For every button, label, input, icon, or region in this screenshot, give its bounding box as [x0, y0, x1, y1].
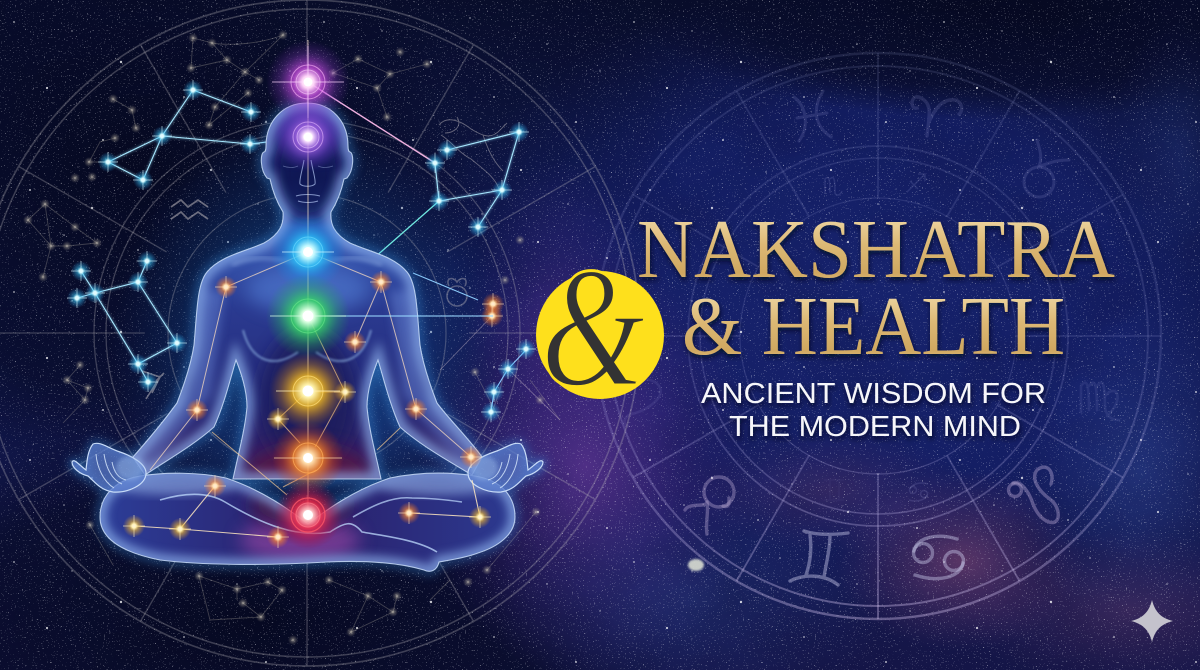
figure outer glow [72, 103, 543, 571]
icon: small cancer glyph [909, 483, 928, 501]
meditating figure [72, 103, 543, 571]
icon: libra glyph left [624, 379, 661, 426]
right zodiac wheel [595, 53, 1161, 619]
icon: crab outline [439, 117, 507, 189]
chakra: solar plexus [270, 353, 346, 429]
icon: sparkle watermark [1131, 600, 1173, 642]
chakra: crown [266, 40, 350, 124]
icon: taurus glyph [1024, 140, 1069, 197]
title [637, 203, 1115, 373]
icon: capricorn-like glyph [142, 371, 164, 399]
chakra: third eye [274, 103, 342, 171]
title line: & HEALTH: & HEALTH [682, 280, 1065, 373]
subtitle: ANCIENT WISDOM FOR [701, 378, 1046, 410]
right hand [468, 443, 543, 492]
constellation: right of figure [413, 273, 560, 422]
icon: aquarius glyph [171, 200, 208, 219]
constellation: upper right [308, 82, 529, 316]
icon: pisces glyph [794, 91, 831, 141]
torso, head and arms [133, 103, 482, 505]
crossed legs [100, 473, 515, 571]
icon: small scorpio glyph [825, 178, 842, 195]
subtitle [701, 378, 1046, 443]
icon: leo glyph lower right [1008, 467, 1058, 523]
faint background constellations [28, 35, 560, 632]
icon: small sagittarius glyph [907, 174, 925, 192]
energy lines through the body [134, 40, 493, 537]
icon: virgo glyph right [1081, 383, 1119, 420]
subtitle: THE MODERN MIND [729, 411, 1021, 443]
icon: aries glyph [912, 97, 962, 136]
chakra: root [274, 481, 342, 549]
icon: leo-like glyph lower left [685, 477, 734, 534]
body stars [123, 271, 491, 548]
chakra: throat [270, 214, 346, 290]
icon: taurus outline right [447, 279, 467, 306]
icon: gemini glyph [790, 531, 848, 585]
yellow ampersand badge: & [541, 233, 645, 423]
constellation: middle left [67, 251, 187, 392]
title line: NAKSHATRA: NAKSHATRA [637, 203, 1115, 296]
bright blob near the wheel [688, 559, 704, 571]
icon: small gemini glyph [824, 480, 844, 500]
chakra: sacral [272, 422, 344, 494]
face features [283, 160, 333, 202]
chest contour [243, 330, 371, 361]
left blue haze behind figure [112, 120, 502, 580]
constellation: upper left [98, 80, 307, 190]
chakra: heart [266, 274, 350, 358]
left zodiac wheel [0, 0, 640, 666]
icon: cancer glyph [914, 536, 964, 579]
faint constellation stars [23, 30, 545, 645]
left hand [72, 443, 146, 492]
